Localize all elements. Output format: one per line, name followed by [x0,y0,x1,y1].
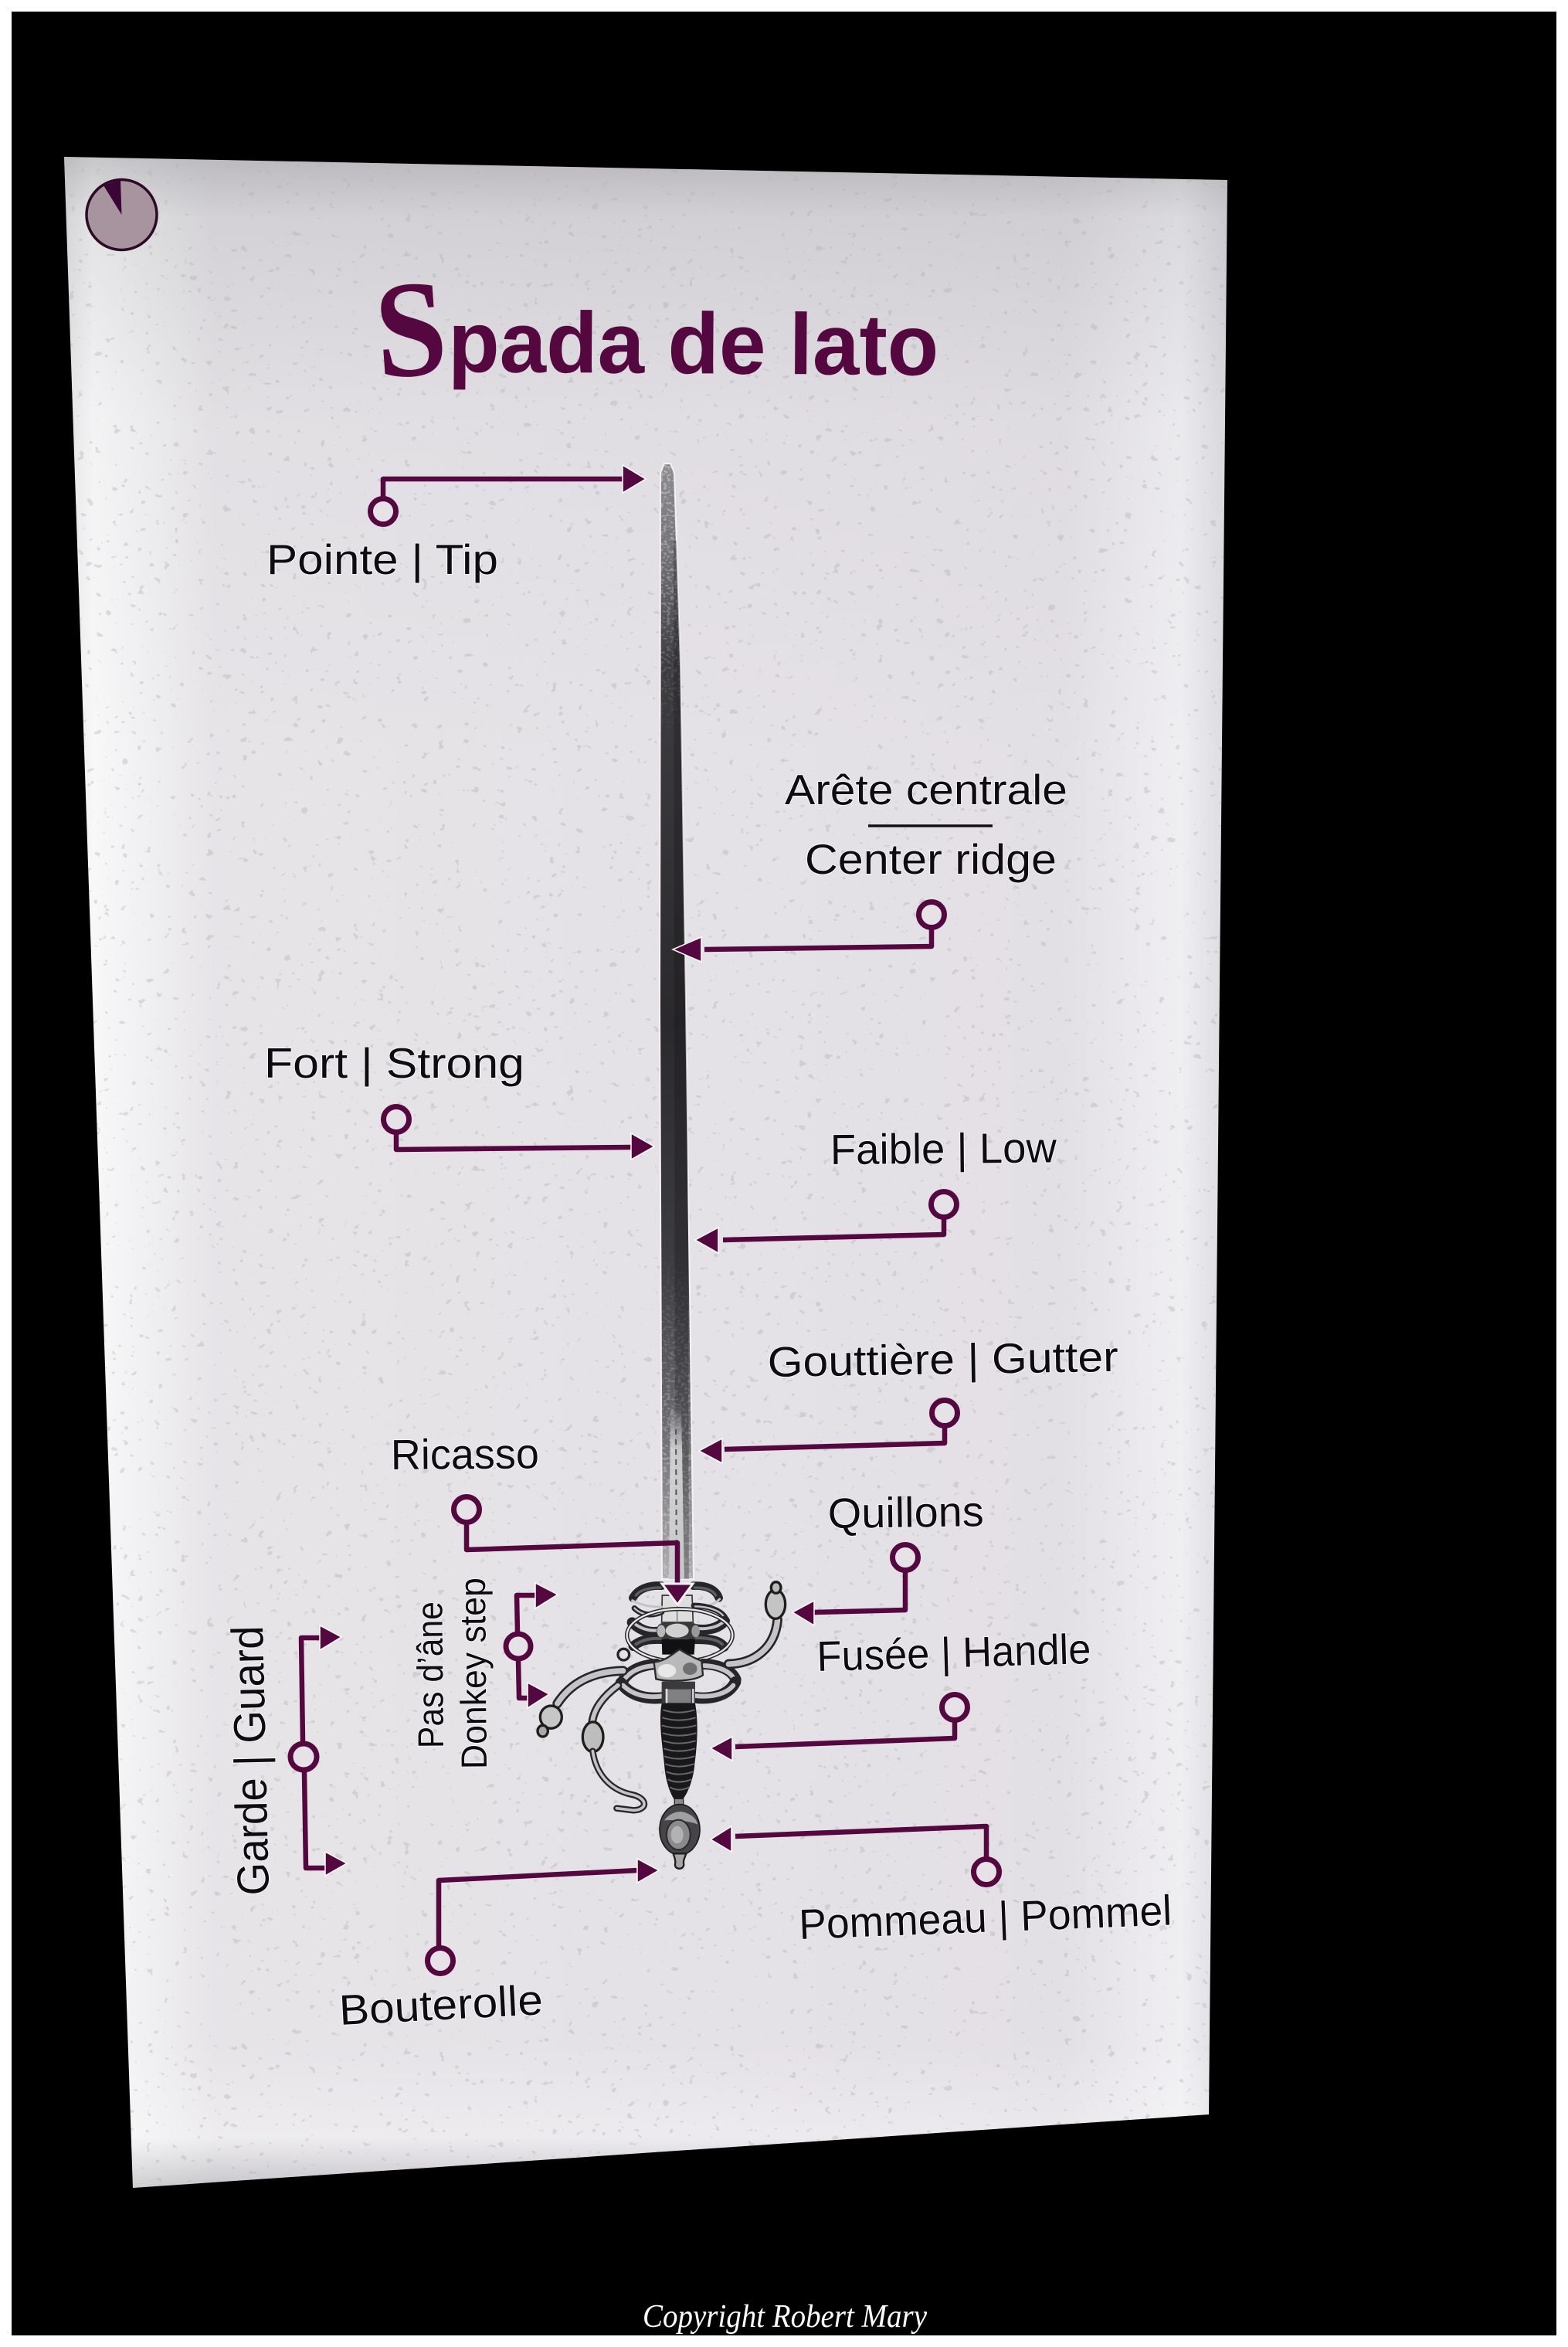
callout: center ridge [673,766,1067,962]
label: Pommeau | Pommel: Pommeau | Pommel [798,1886,1173,1948]
sword blade [659,463,694,1580]
callout: bouterolle [338,1859,659,2034]
title: S [370,250,452,408]
label: Arête centrale: Arête centrale [785,766,1067,813]
callout: gutter [699,1333,1118,1463]
hilt: pommel [660,1798,700,1869]
label: Fort | Strong: Fort | Strong [264,1039,524,1087]
icon: clock pie [87,179,157,250]
callout: donkey step [409,1578,558,1769]
label: Bouterolle: Bouterolle [338,1975,544,2034]
arrow: guard top [320,1625,341,1650]
hilt: ricasso [662,1595,693,1622]
arrow: donkey step bottom [528,1683,549,1708]
hilt: quillons [538,1582,786,1810]
callout: guard [222,1625,347,1896]
copyright line: Copyright Robert Mary [643,2299,927,2335]
arrow: strong [631,1133,654,1160]
callout: low [695,1123,1057,1253]
label: Ricasso: Ricasso [391,1429,539,1479]
arrow: low [695,1228,718,1253]
arrow: guard bottom [325,1852,347,1876]
arrow: ricasso [662,1584,693,1605]
callout: handle [711,1625,1091,1761]
arrow: pommel [711,1826,731,1852]
label: Fusée | Handle: Fusée | Handle [816,1625,1091,1680]
arrow: quillons [792,1601,814,1625]
label: Quillons: Quillons [827,1487,984,1537]
arrow: handle [711,1737,732,1761]
label: Gouttière | Gutter: Gouttière | Gutter [767,1333,1118,1386]
arrow: donkey step top [535,1583,558,1608]
hilt: grip [660,1703,697,1800]
label: Donkey step: Donkey step [452,1578,494,1769]
arrow: tip [623,465,646,493]
label: Faible | Low: Faible | Low [830,1123,1057,1174]
callout: quillons [792,1487,984,1625]
label: Pas d'âne: Pas d’âne [409,1601,451,1748]
arrow: center ridge [673,937,701,962]
callout: pommel [711,1826,1173,1948]
label: Pointe | Tip: Pointe | Tip [266,535,498,583]
callout: strong [264,1039,654,1160]
panel surface [64,157,1227,2188]
callout: ricasso [391,1429,693,1605]
hilt: lower ring guard [621,1649,736,1703]
hilt: upper guard rings [618,1585,732,1662]
sword hilt: guard, grip and pommel [538,1582,786,1869]
arrow: gutter [699,1438,722,1463]
title: pada de lato [448,294,939,393]
title [370,250,939,408]
panel: illuminated sign [62,155,1232,2194]
arrow: bouterolle [637,1859,659,1883]
label: Garde | Guard: Garde | Guard [222,1625,279,1896]
callout: tip [266,465,646,583]
label: Center ridge: Center ridge [805,835,1057,883]
